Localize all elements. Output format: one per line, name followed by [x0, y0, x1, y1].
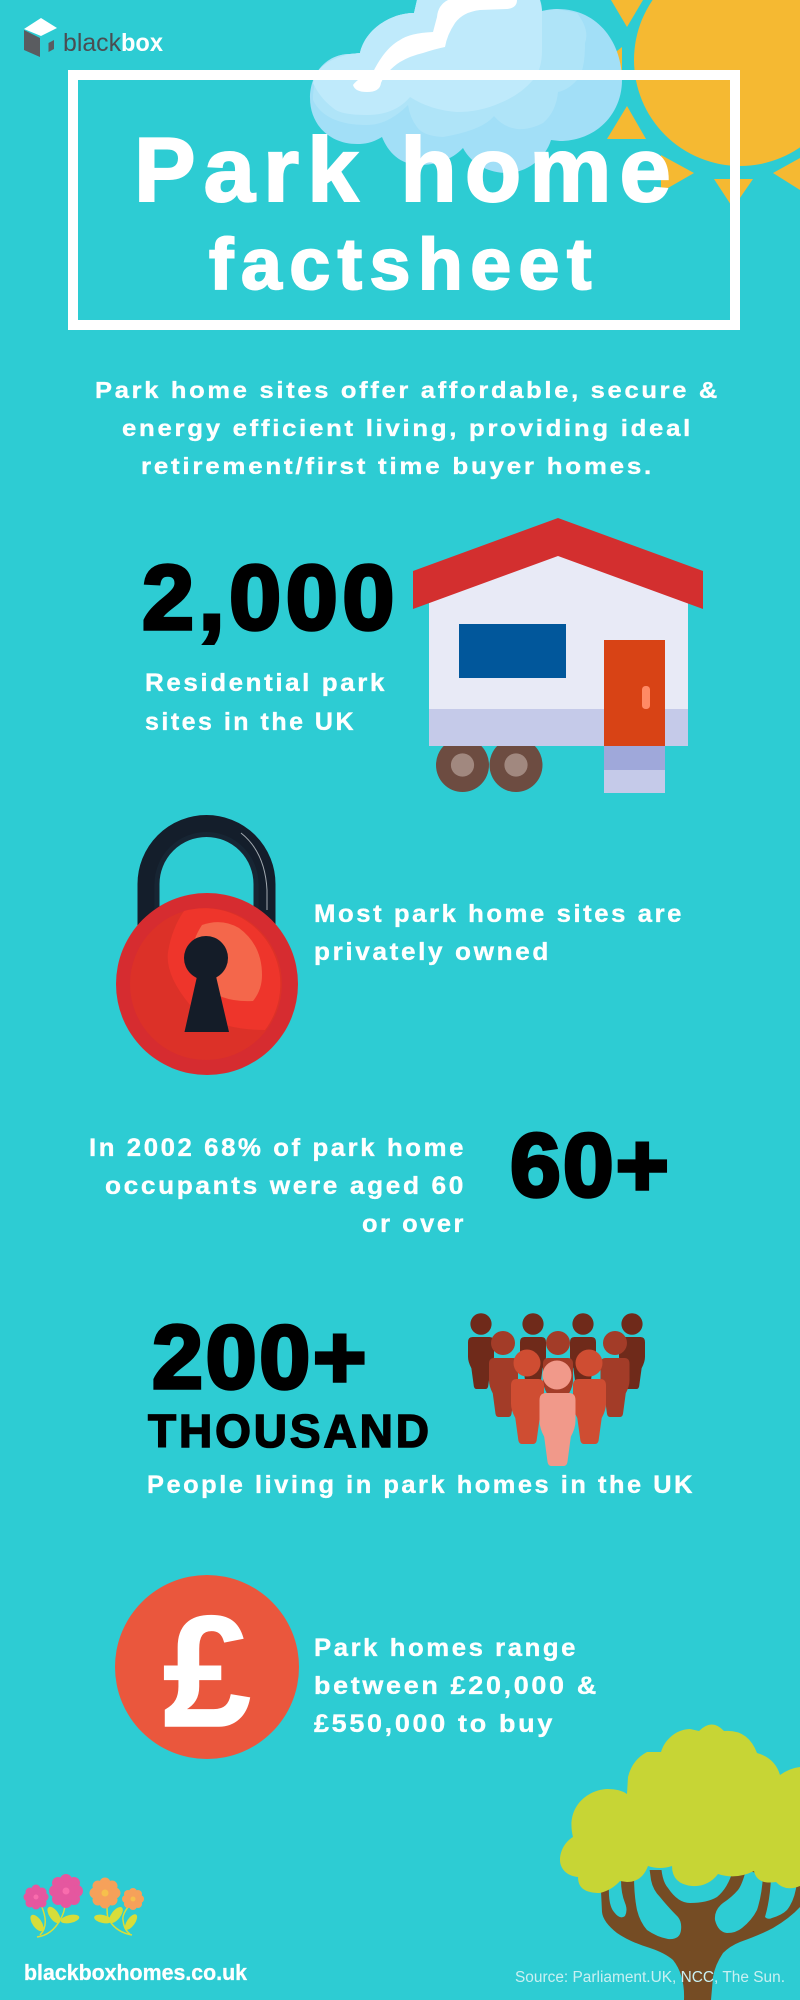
logo: [24, 18, 163, 57]
window: [459, 624, 566, 678]
icon: crowd of people: [468, 1313, 645, 1466]
icon: pound coin: £: [163, 1584, 251, 1760]
caption: occupants were aged 60: [105, 1172, 466, 1200]
door: [604, 640, 665, 746]
number: 200+: [152, 1308, 369, 1408]
caption: In 2002 68% of park home: [89, 1134, 466, 1162]
intro text: Park home sites offer affordable, secure &: [95, 377, 720, 403]
caption: Residential park: [145, 669, 387, 697]
third row: [511, 1350, 606, 1444]
icon: pound coin: [115, 1575, 299, 1760]
stat: privately owned: [314, 900, 684, 966]
door handle: [642, 686, 650, 709]
stat: privately owned: Most park home sites are: [314, 900, 684, 928]
keyhole: [184, 936, 229, 1032]
icon: flowers: [24, 1874, 144, 1937]
intro text: energy efficient living, providing ideal: [122, 415, 693, 441]
second row: [489, 1331, 630, 1417]
stat: privately owned: privately owned: [314, 938, 551, 966]
trunk: [600, 1870, 800, 2000]
title line 2: factsheet: [209, 225, 599, 305]
number: 60+: [510, 1116, 671, 1216]
caption: sites in the UK: [145, 708, 356, 736]
logo wordmark: [63, 29, 163, 57]
source credit: Source: Parliament.UK, NCC, The Sun.: [515, 1969, 785, 1986]
icon: cloud: [310, 0, 622, 173]
stat: price range: between £20,000 &: [314, 1672, 599, 1700]
icon: tree: [560, 1724, 800, 2000]
icon: logo box: [24, 18, 57, 57]
wheels: [436, 738, 542, 792]
caption: or over: [362, 1210, 466, 1238]
front person: [540, 1360, 576, 1466]
intro text: [95, 377, 720, 479]
canopy: [560, 1724, 800, 1893]
icon: sun: [607, 0, 800, 208]
stat: aged 60+: [89, 1116, 671, 1238]
stat: price range: Park homes range: [314, 1634, 578, 1662]
steps: [604, 746, 665, 793]
roof: [413, 518, 703, 609]
stat: 200+ thousand: [147, 1308, 695, 1499]
caption: People living in park homes in the UK: [147, 1471, 695, 1499]
pink flowers: [24, 1874, 83, 1910]
lock body: [116, 893, 298, 1075]
walls: [429, 550, 688, 709]
title line 1: Park home: [134, 120, 679, 221]
icon: park home: [413, 518, 703, 793]
cloud highlight: [353, 0, 517, 92]
stat: price range: £550,000 to buy: [314, 1710, 555, 1738]
stat: price range: [314, 1634, 599, 1738]
caption: [89, 1134, 466, 1238]
gaps between branches: [609, 1860, 797, 1939]
shackle: [148, 826, 267, 935]
caption: [145, 669, 387, 736]
title panel: [73, 75, 735, 325]
stems and leaves: [37, 1903, 132, 1937]
orange flowers: [90, 1878, 144, 1910]
website: blackboxhomes.co.uk: [24, 1960, 248, 1985]
logo wordmark: black: [63, 29, 121, 57]
logo wordmark: box: [121, 29, 163, 57]
unit: THOUSAND: [148, 1405, 429, 1457]
intro text: retirement/first time buyer homes.: [141, 453, 654, 479]
back row: [468, 1313, 645, 1389]
icon: padlock: [116, 826, 298, 1075]
number: 2,000: [142, 547, 399, 649]
stat: 2,000 sites: [142, 547, 399, 736]
title frame: [73, 75, 735, 325]
